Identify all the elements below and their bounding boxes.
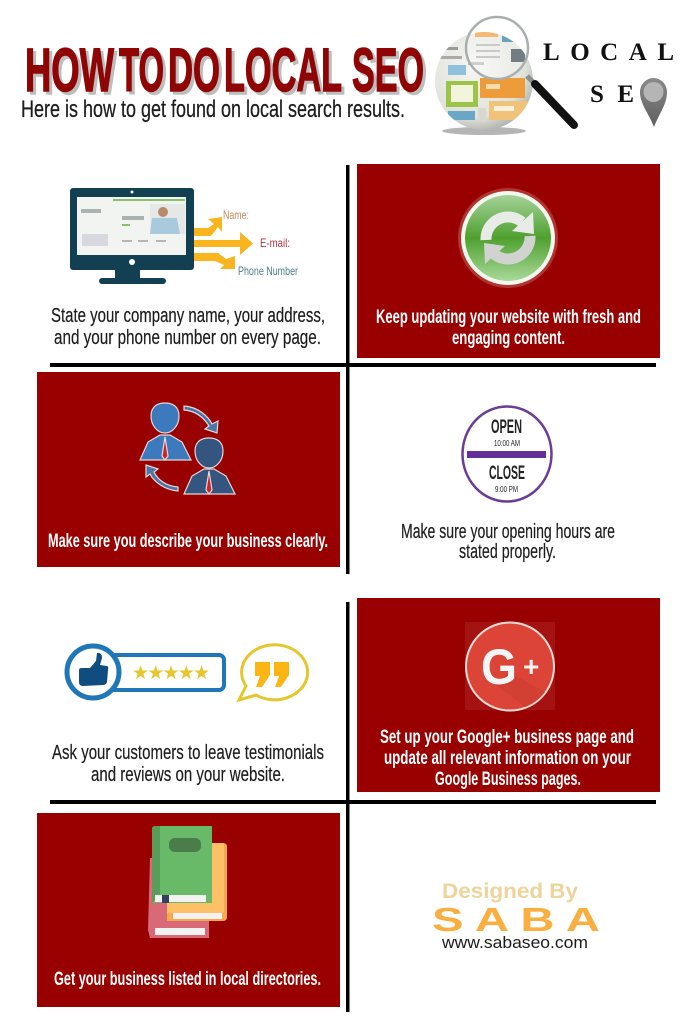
title: SEO: [352, 36, 424, 104]
icon: open close sign: 9:00 PM: [495, 484, 518, 494]
website: www.sabaseo.com: [441, 933, 588, 952]
icon: google plus: [465, 622, 555, 710]
title: TO: [119, 36, 164, 104]
saba logo: S A B A: [432, 901, 600, 938]
panel: update content: [357, 164, 660, 358]
label: name: Name:: [223, 208, 249, 222]
label: email: E-mail:: [260, 236, 290, 250]
icon: google plus: +: [523, 651, 539, 682]
icon: globe with magnifying glass: [435, 17, 574, 135]
icon: map pin: [640, 78, 667, 127]
caption: Get your business listed in local directories.: [54, 969, 321, 990]
icon: open close sign: 10:00 AM: [494, 438, 520, 448]
icon: open close sign: CLOSE: [489, 463, 525, 484]
panel: describe business: [37, 372, 340, 567]
caption: Make sure you describe your business clearly.: [48, 531, 328, 552]
panel: google plus: [357, 598, 660, 792]
caption: Google Business pages.: [435, 769, 581, 790]
title: DO: [171, 39, 223, 107]
icon: stack of books: [148, 826, 227, 938]
title: SEO: [355, 39, 427, 107]
panel: designer credit: [432, 880, 600, 952]
caption: Make sure your opening hours are: [401, 521, 615, 543]
title: HOW: [28, 39, 117, 107]
caption: stated properly.: [459, 541, 556, 563]
local seo logo text: LOCAL: [543, 39, 674, 66]
subtitle: Here is how to get found on local search results.: [21, 96, 405, 123]
caption: [52, 742, 324, 786]
panel: directories: [37, 813, 340, 1007]
panel: contact details: [51, 188, 325, 349]
title: DO: [168, 36, 220, 104]
local seo logo text: SE: [590, 81, 634, 108]
designed by: Designed By: [442, 880, 578, 903]
title: LOCAL: [227, 39, 345, 107]
label: phone number: Phone Number: [238, 264, 298, 278]
caption: [401, 521, 615, 563]
caption: and your phone number on every page.: [54, 327, 321, 349]
title: [25, 36, 427, 107]
caption: [51, 305, 325, 349]
title: TO: [122, 39, 167, 107]
icon: computer monitor: [70, 188, 194, 284]
caption: engaging content.: [452, 328, 565, 349]
icon: quote bubble: [239, 645, 308, 700]
caption: [376, 307, 641, 349]
icon: open close sign: [462, 406, 552, 502]
icon: two people with arrows: [140, 403, 235, 494]
icon: open close sign: OPEN: [491, 417, 522, 438]
title: HOW: [25, 36, 114, 104]
icon: google plus: G: [481, 639, 517, 695]
caption: and reviews on your website.: [91, 764, 285, 786]
title: LOCAL: [224, 36, 342, 104]
caption: State your company name, your address,: [51, 305, 325, 327]
icon: rating badge: ★★★★★: [132, 662, 210, 684]
arrows: [194, 217, 253, 269]
panel: opening hours: [401, 406, 615, 563]
caption: Ask your customers to leave testimonials: [52, 742, 324, 764]
panel: testimonials: [52, 645, 324, 786]
caption: [380, 727, 634, 790]
local seo logo text: [543, 39, 674, 108]
icon: green refresh button: [458, 188, 558, 288]
icon: rating badge: [67, 646, 224, 698]
panel: divider lines: [50, 165, 656, 1012]
